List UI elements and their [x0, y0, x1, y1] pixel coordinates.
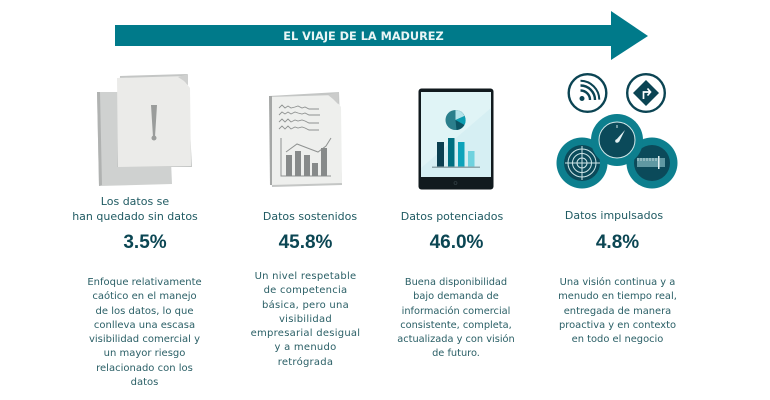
column 4 description: entregada de manera [564, 306, 671, 317]
column 1 description: conlleva una escasa [94, 320, 195, 331]
arrow: el viaje de la madurez [115, 11, 648, 60]
icon: rss [569, 74, 606, 112]
column 1 heading: Los datos se [101, 195, 169, 208]
column 1 description: un mayor riesgo [104, 348, 185, 359]
column 2 heading: Datos sostenidos [263, 210, 357, 223]
column 1 description: relacionado con los [96, 363, 193, 374]
column 2 description: visibilidad [279, 314, 332, 325]
column 1 description: caótico en el manejo [92, 291, 197, 302]
column 4 heading: Datos impulsados [565, 209, 663, 222]
column 3 description: bajo demanda de [413, 291, 499, 302]
icon: radar [556, 138, 608, 188]
column 2 percentage: 45.8% [279, 232, 332, 253]
column 2 description: de competencia [264, 285, 347, 296]
column 3 description: actualizada y con visión [397, 334, 515, 345]
column 1 percentage: 3.5% [123, 232, 167, 253]
column 4 percentage: 4.8% [596, 232, 639, 253]
column 4 description: menudo en tiempo real, [558, 291, 677, 302]
icon: papers with exclamation mark [97, 74, 192, 186]
column 3 description [397, 277, 515, 359]
column 1 description [87, 277, 202, 388]
column 1 heading: han quedado sin datos [72, 210, 198, 223]
column 3 description: de futuro. [432, 348, 480, 359]
icon: document with chart [269, 92, 342, 187]
icon: road sign [627, 74, 665, 112]
column 1 description: de los datos, lo que [96, 306, 193, 317]
icon: tablet with charts [418, 88, 494, 190]
column 3 description: consistente, completa, [400, 320, 512, 331]
column 2 description: y a menudo [275, 342, 336, 353]
column 3 description: información comercial [402, 306, 510, 317]
column 4 description [558, 277, 677, 345]
column 4 description: proactiva y en contexto [559, 320, 676, 331]
column 4 description: Una visión continua y a [560, 277, 675, 288]
icon: panel display [626, 138, 678, 188]
column 1 description: visibilidad comercial y [89, 334, 200, 345]
arrow: el viaje de la madurez: EL VIAJE DE LA MADUREZ [283, 30, 444, 43]
column 2 description [251, 271, 360, 368]
column 3 heading: Datos potenciados [401, 210, 503, 223]
column 3 description: Buena disponibilidad [405, 277, 507, 288]
column 2 description: básica, pero una [262, 300, 349, 311]
column 1 description: Enfoque relativamente [87, 277, 202, 288]
column 4 description: en todo el negocio [572, 334, 663, 345]
column 1 heading [72, 195, 198, 223]
icon: gauge [591, 114, 643, 166]
column 2 description: empresarial desigual [251, 328, 360, 339]
column 1 description: datos [131, 377, 158, 388]
column 2 description: Un nivel respetable [255, 271, 356, 282]
icon: dashboard circles [556, 73, 678, 188]
column 3 percentage: 46.0% [430, 232, 483, 253]
column 2 description: retrógrada [278, 357, 333, 368]
